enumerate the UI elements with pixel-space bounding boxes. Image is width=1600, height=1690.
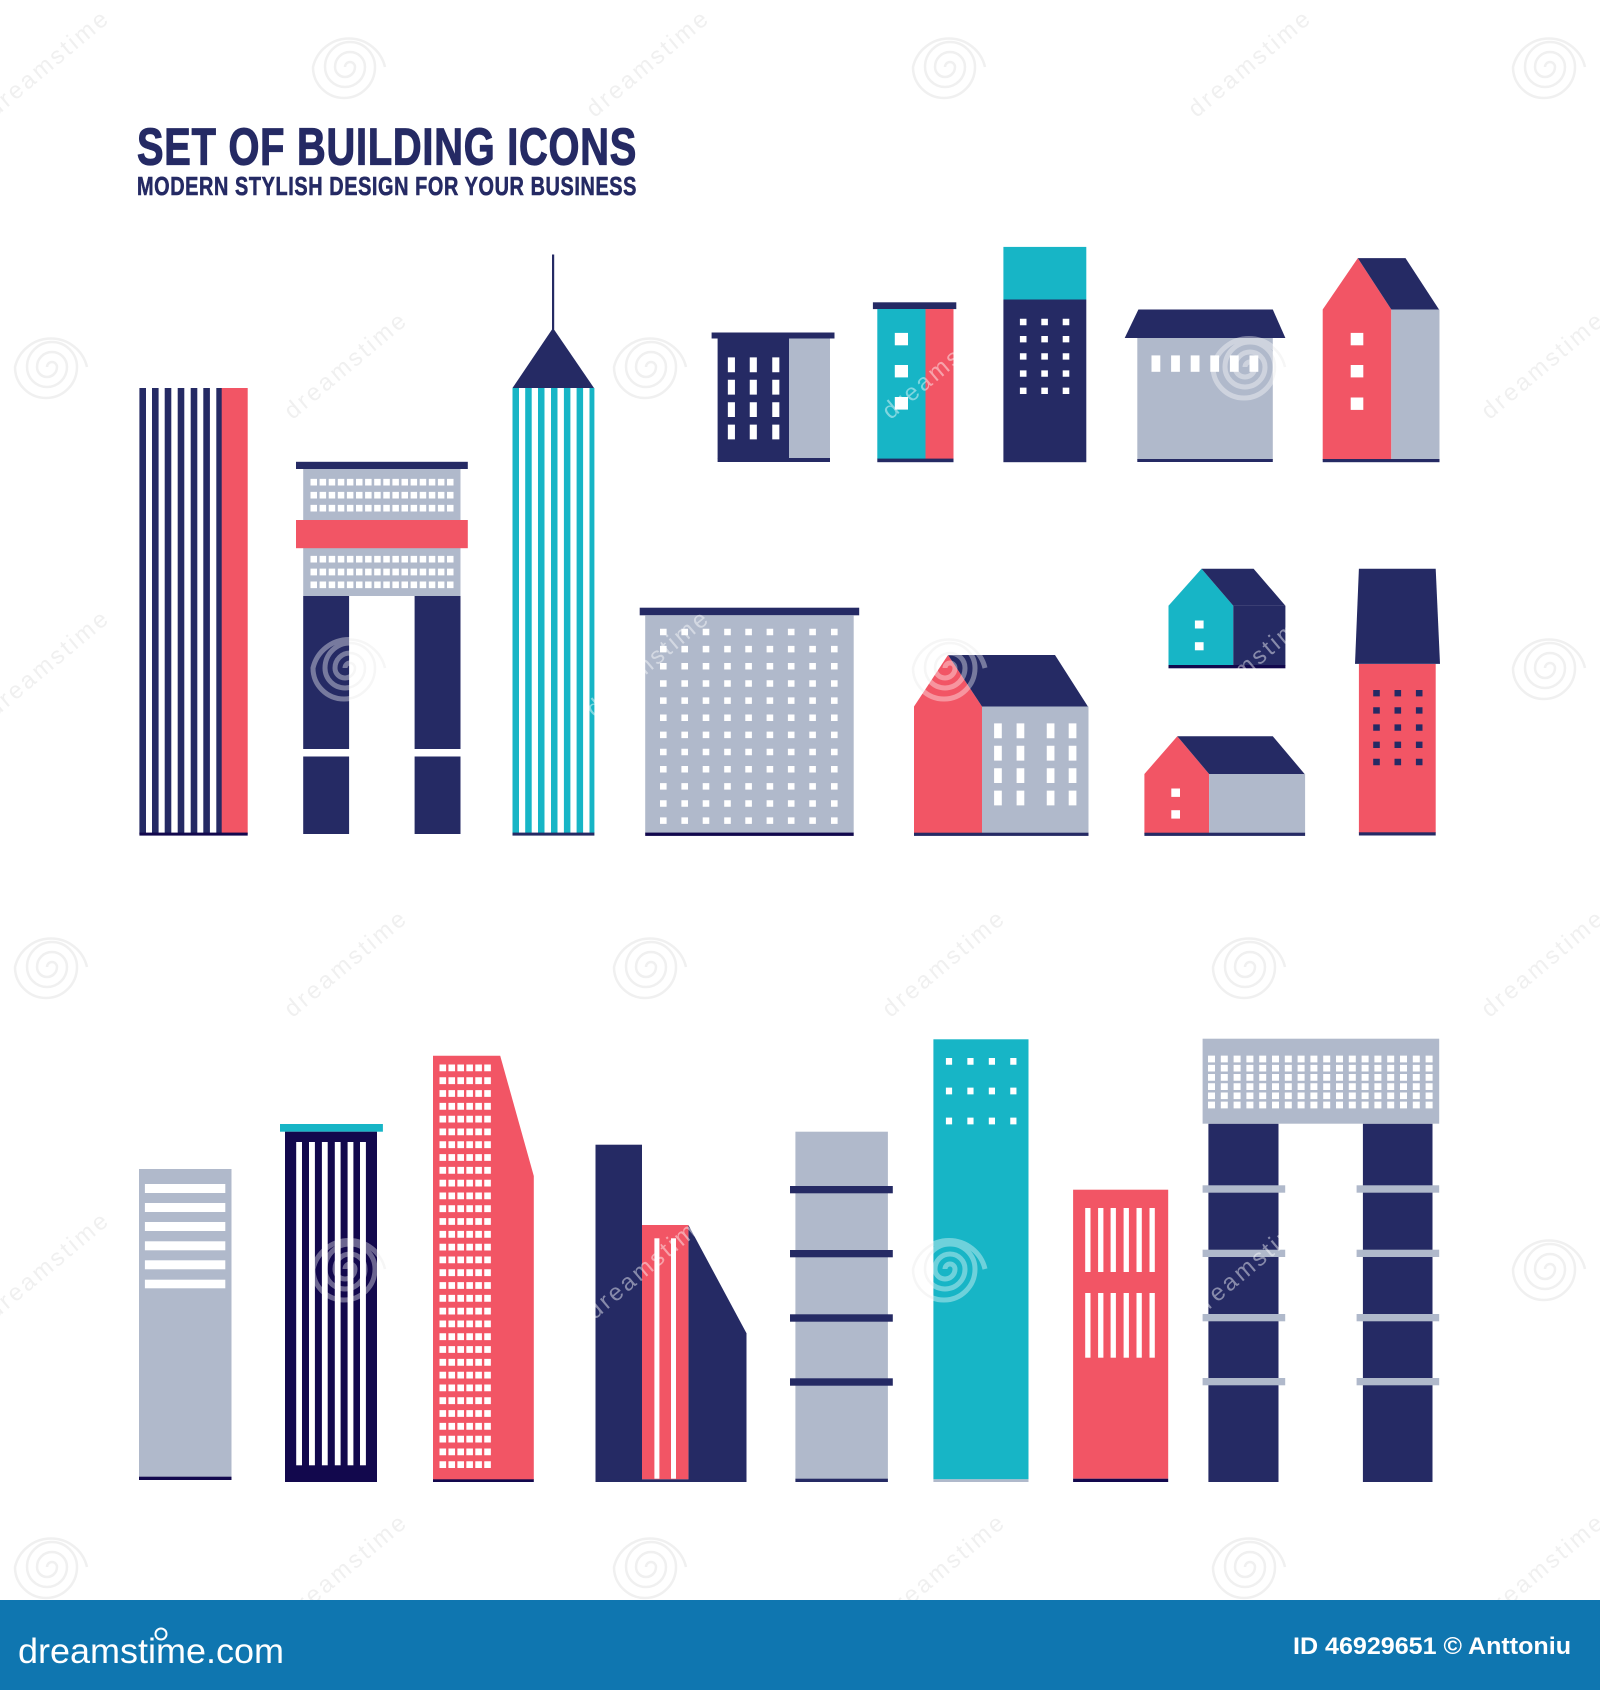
footer logo: dreamstime.com (18, 1632, 284, 1671)
text: dreamstime (1183, 1208, 1315, 1325)
footer bar (0, 1600, 1600, 1690)
text: dreamstime (581, 6, 713, 123)
building: red tower with tall navy roof (1355, 569, 1440, 836)
building: large red and gray house (914, 655, 1088, 836)
building: teal striped spire (512, 254, 594, 836)
subtitle: MODERN STYLISH DESIGN FOR YOUR BUSINESS (137, 171, 637, 201)
building: small red and gray house (1144, 736, 1305, 836)
text: dreamstime (581, 1208, 713, 1325)
building: gray house with flat navy roof (1125, 310, 1285, 462)
building: small teal house (1168, 569, 1285, 668)
building: gray tower with horizontal bars (139, 1169, 232, 1480)
text: dreamstime (1183, 606, 1315, 723)
text: dreamstime (279, 1510, 411, 1627)
building: navy tower with teal top (1003, 247, 1086, 462)
building: teal and red tower (873, 302, 956, 462)
text: dreamstime (877, 1510, 1009, 1627)
building: arch tower with red band (296, 462, 468, 834)
text: dreamstime (279, 906, 411, 1023)
text: dreamstime (1183, 6, 1315, 123)
building: striped navy tower with red side (139, 388, 248, 836)
building: gray block with window grid (640, 608, 859, 836)
building: navy stepped tower with red core (596, 1145, 746, 1482)
building: red tower with vertical window stripes (1073, 1190, 1168, 1482)
text: dreamstime (877, 308, 1009, 425)
building: teal tower with top windows (933, 1039, 1028, 1482)
building: red slanted skyscraper (433, 1056, 534, 1482)
title: SET OF BUILDING ICONS (137, 118, 637, 176)
building: gate tower with gray top and navy legs (1203, 1039, 1439, 1482)
text: dreamstime (279, 308, 411, 425)
building: tall red gabled house (1323, 258, 1440, 462)
building: navy block with gray side (712, 332, 834, 462)
text: dreamstime (877, 906, 1009, 1023)
text: dreamstime (581, 606, 713, 723)
building: dark tower with teal cap (280, 1124, 383, 1482)
building: gray tower with navy floor bands (790, 1132, 893, 1482)
image id credit: ID 46929651 © Anttoniu (1293, 1633, 1571, 1660)
